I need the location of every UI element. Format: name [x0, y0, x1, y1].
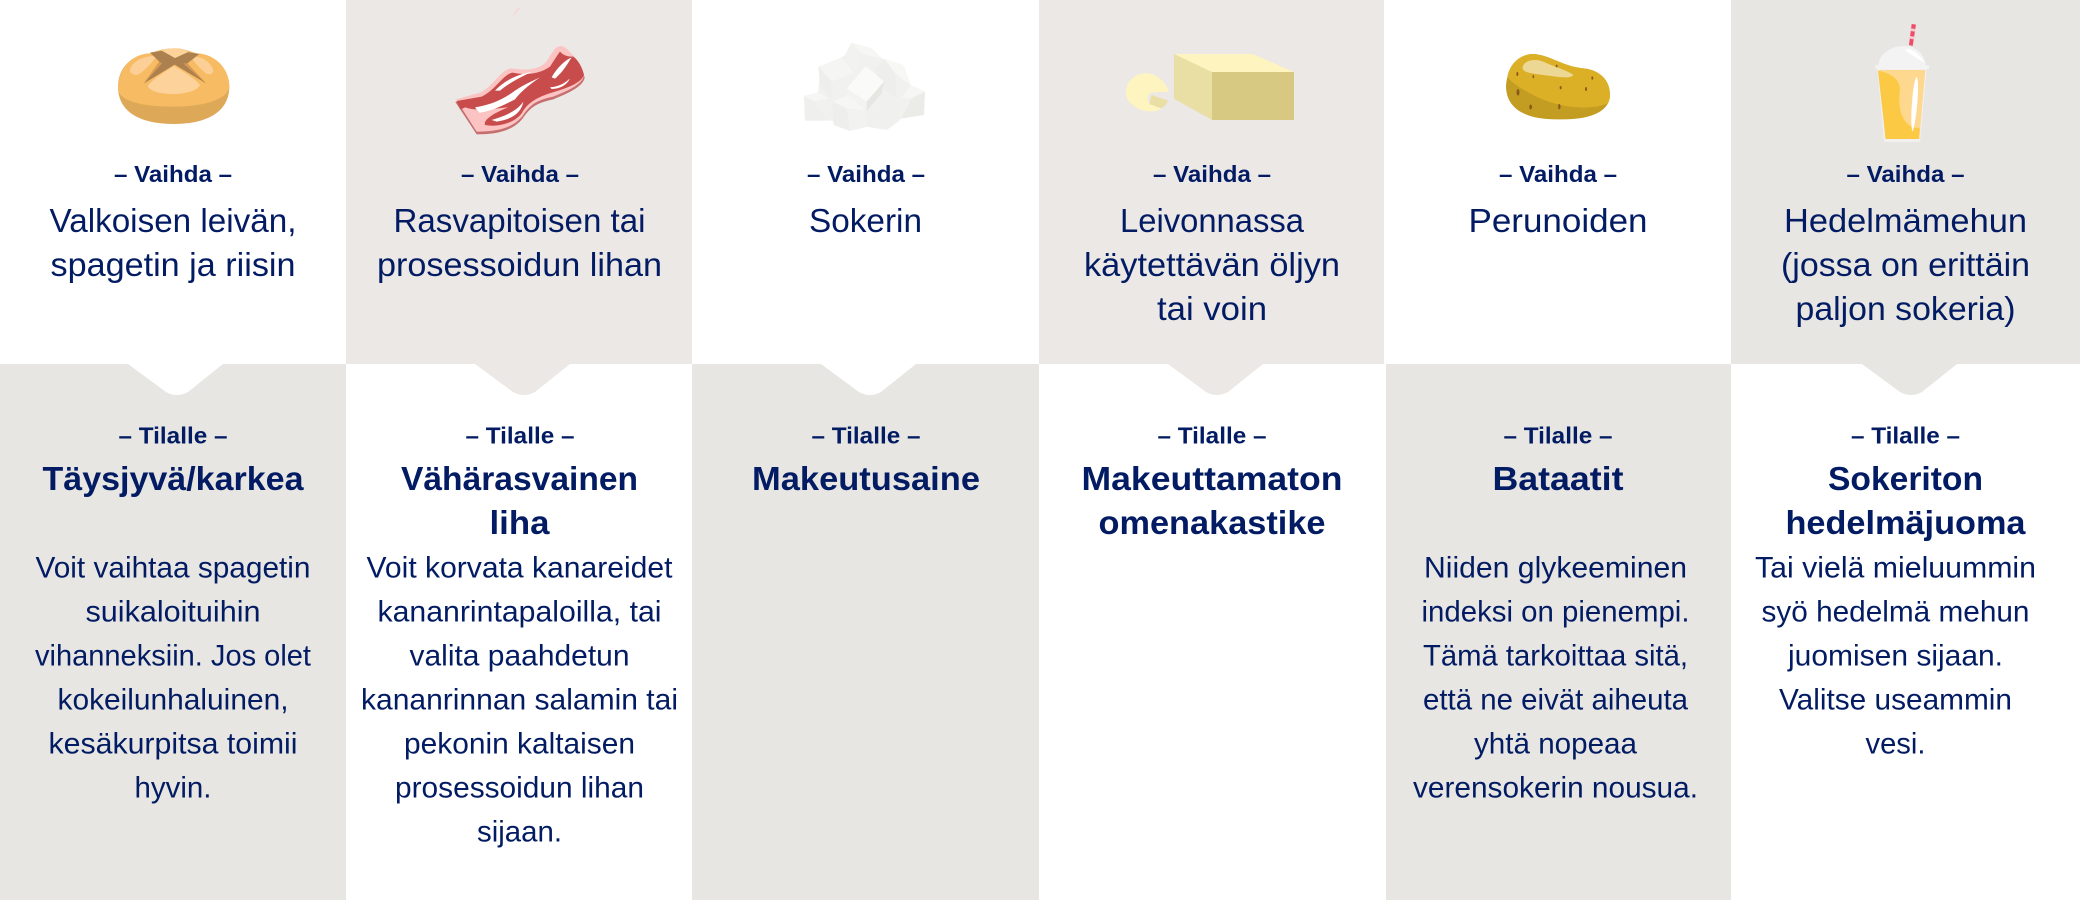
body text	[1755, 552, 2036, 760]
heading: from: prosessoidun lihan	[377, 246, 662, 283]
heading: from	[1781, 202, 2030, 327]
top cell background	[0, 0, 346, 364]
body text: kokeilunhaluinen,	[58, 684, 288, 716]
body text	[361, 552, 678, 848]
heading: from: tai voin	[1157, 290, 1267, 327]
label: Tilalle: – Tilalle –	[812, 422, 920, 448]
body text: yhtä nopeaa	[1474, 728, 1638, 760]
body text: vesi.	[1866, 728, 1926, 760]
icon: bread roll	[118, 48, 229, 124]
heading: to: Vähärasvainen	[401, 460, 638, 497]
heading: from: spagetin ja riisin	[50, 246, 296, 283]
panel: column 1 bread	[0, 0, 346, 900]
icon: sugar cubes	[804, 43, 925, 131]
body text: juomisen sijaan.	[1787, 640, 2003, 672]
notch pointer	[1862, 364, 1957, 395]
body text: syö hedelmä mehun	[1762, 596, 2030, 628]
body text: suikaloituihin	[86, 596, 260, 628]
label: Tilalle: – Tilalle –	[1158, 422, 1266, 448]
heading: from	[50, 202, 296, 283]
panel: column 3 sugar	[692, 0, 1039, 900]
heading: from: Rasvapitoisen tai	[394, 202, 646, 239]
body text: verensokerin nousua.	[1413, 772, 1698, 804]
heading: from: paljon sokeria)	[1796, 290, 2016, 327]
top cell background	[1039, 0, 1384, 364]
heading: to: Bataatit	[1492, 460, 1624, 497]
body text: hyvin.	[134, 772, 212, 804]
body text	[35, 552, 311, 804]
label: Vaihda: – Vaihda –	[1153, 161, 1271, 187]
bottom cell background	[0, 364, 346, 900]
body text: Tai vielä mieluummin	[1755, 552, 2036, 584]
heading: from	[377, 202, 662, 283]
heading: from: Valkoisen leivän,	[50, 202, 296, 239]
label: Vaihda: – Vaihda –	[1499, 161, 1617, 187]
notch pointer	[128, 364, 223, 395]
icon: juice cup	[1875, 24, 1929, 142]
body text: prosessoidun lihan	[395, 772, 644, 804]
top cell background	[1731, 0, 2080, 364]
body text: Voit vaihtaa spagetin	[36, 552, 310, 584]
body text: Tämä tarkoittaa sitä,	[1423, 640, 1688, 672]
bottom cell background	[346, 364, 692, 900]
body text: kesäkurpitsa toimii	[48, 728, 298, 760]
top cell background	[346, 0, 692, 364]
body text: kananrintapaloilla, tai	[378, 596, 662, 628]
label: Tilalle: – Tilalle –	[1504, 422, 1612, 448]
heading: to	[401, 460, 638, 541]
icon: butter	[1126, 54, 1294, 120]
label: Vaihda: – Vaihda –	[1846, 161, 1964, 187]
top cell background	[1384, 0, 1731, 364]
heading: to: hedelmäjuoma	[1786, 504, 2026, 541]
label: Tilalle: – Tilalle –	[1851, 422, 1960, 448]
heading: to: Täysjyvä/karkea	[42, 460, 304, 497]
heading: to: Makeuttamaton	[1082, 460, 1342, 497]
notch pointer	[475, 364, 570, 395]
body text: vihanneksiin. Jos olet	[35, 640, 311, 672]
label: Tilalle: – Tilalle –	[466, 422, 574, 448]
bottom cell background	[1386, 364, 1731, 900]
body text: Voit korvata kanareidet	[366, 552, 672, 584]
heading: from: Perunoiden	[1468, 202, 1648, 239]
heading: from: Leivonnassa	[1120, 202, 1305, 239]
heading: to: liha	[490, 504, 550, 541]
heading: from: Sokerin	[809, 202, 922, 239]
body text: valita paahdetun	[410, 640, 630, 672]
body text: kananrinnan salamin tai	[361, 684, 678, 716]
label: Tilalle: – Tilalle –	[118, 422, 228, 448]
heading: from: (jossa on erittäin	[1781, 246, 2030, 283]
heading: to: Sokeriton	[1828, 460, 1983, 497]
body text: Valitse useammin	[1779, 684, 2012, 716]
body text: sijaan.	[477, 816, 562, 848]
notch pointer	[1168, 364, 1263, 395]
panel: column 6 juice	[1731, 0, 2080, 900]
label: Vaihda: – Vaihda –	[807, 161, 925, 187]
top cell background	[692, 0, 1039, 364]
heading: to: Makeutusaine	[752, 460, 980, 497]
body text: että ne eivät aiheuta	[1423, 684, 1689, 716]
icon: bacon	[455, 7, 585, 134]
heading: to: omenakastike	[1098, 504, 1326, 541]
body text	[1413, 552, 1698, 804]
heading: to	[1786, 460, 2026, 541]
panel: column 5 potato	[1384, 0, 1731, 900]
body text: indeksi on pienempi.	[1422, 596, 1690, 628]
label: Vaihda: – Vaihda –	[114, 161, 232, 187]
bottom cell background	[692, 364, 1039, 900]
heading: from	[1084, 202, 1340, 327]
label: Vaihda: – Vaihda –	[461, 161, 579, 187]
heading: from: käytettävän öljyn	[1084, 246, 1340, 283]
bottom cell background	[1731, 364, 2080, 900]
body text: Niiden glykeeminen	[1424, 552, 1687, 584]
panel: column 4 butter	[1039, 0, 1386, 900]
icon: potato	[1506, 54, 1610, 119]
body text: pekonin kaltaisen	[404, 728, 635, 760]
heading: to	[1082, 460, 1342, 541]
notch pointer	[821, 364, 916, 395]
panel: column 2 meat	[346, 0, 692, 900]
bottom cell background	[1039, 364, 1386, 900]
heading: from: Hedelmämehun	[1784, 202, 2027, 239]
